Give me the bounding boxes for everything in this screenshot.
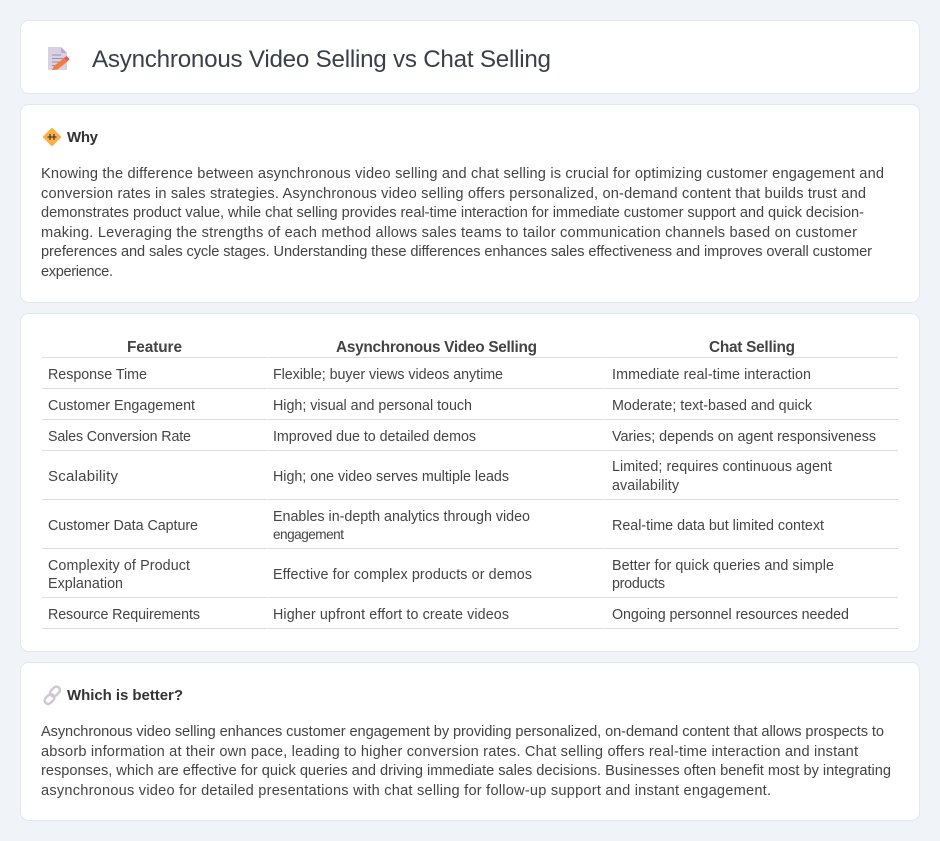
text block: which paragraph: asynchronous video for detailed presentations with chat selling for follow-up support and instant engagement.	[41, 783, 771, 799]
table header row: Chat Selling	[709, 339, 795, 356]
row: customer engagement	[48, 398, 813, 414]
row: customer data capture: Real-time data but limited context	[612, 518, 824, 534]
icon: link	[43, 685, 61, 705]
title: Asynchronous Video Selling vs Chat Selling	[92, 46, 551, 73]
row: customer data capture	[48, 509, 824, 542]
row: resource requirements: Higher upfront effort to create videos	[273, 607, 509, 623]
row: customer data capture: engagement	[273, 527, 344, 542]
text block: why paragraph: conversion rates in sales strategies. Asynchronous video selling offers personalized, on-demand content that builds trust and	[41, 186, 866, 202]
row: sales conversion rate: Improved due to detailed demos	[273, 429, 476, 445]
row: resource requirements: Ongoing personnel resources needed	[612, 607, 849, 623]
text block: which paragraph	[41, 724, 891, 799]
row: response time: Flexible; buyer views videos anytime	[273, 367, 503, 383]
panel: which is better	[20, 662, 920, 820]
row: resource requirements	[48, 607, 849, 623]
row: response time: Response Time	[48, 367, 147, 383]
row: complexity of product explanation: Effective for complex products or demos	[273, 567, 532, 583]
row: scalability: availability	[612, 478, 680, 494]
table header row	[127, 339, 795, 356]
row: response time	[48, 367, 811, 383]
panel: title header	[20, 20, 920, 94]
heading: why: Why	[67, 129, 99, 146]
row: customer engagement: Moderate; text-based and quick	[612, 398, 813, 414]
row: sales conversion rate	[48, 429, 876, 445]
row: customer engagement: Customer Engagement	[48, 398, 195, 414]
text block: which paragraph: Asynchronous video selling enhances customer engagement by providing personalized, on-demand content that allows prospects to	[41, 724, 884, 740]
row: scalability: High; one video serves multiple leads	[273, 469, 509, 485]
row: sales conversion rate: Varies; depends on agent responsiveness	[612, 429, 876, 445]
row: scalability: Scalability	[48, 468, 118, 485]
row: complexity of product explanation	[48, 558, 834, 592]
text block: which paragraph: absorb information at their own pace, leading to higher conversion rates. Chat selling offers real-time interaction and instant	[41, 744, 858, 760]
row: complexity of product explanation: Explanation	[48, 576, 123, 592]
row: customer data capture: Customer Data Capture	[48, 518, 198, 534]
heading: which is better: Which is better?	[67, 687, 183, 704]
text block: why paragraph: preferences and sales cycle stages. Understanding these differences enhances sales effectiveness and improves overall customer	[41, 244, 872, 260]
row: customer data capture: Enables in-depth analytics through video	[273, 509, 530, 525]
panel: why	[20, 104, 920, 302]
icon: warning diamond	[44, 128, 60, 146]
row: sales conversion rate: Sales Conversion Rate	[48, 429, 191, 445]
row: scalability: Limited; requires continuous agent	[612, 459, 832, 475]
row: customer engagement: High; visual and personal touch	[273, 398, 472, 414]
table header row: Feature	[127, 339, 182, 356]
text block: why paragraph: demonstrates product value, while chat selling provides real-time interaction for immediate customer support and quick decision-	[41, 205, 864, 221]
text block: why paragraph: experience.	[41, 264, 113, 280]
text block: why paragraph: making. Leveraging the strengths of each method allows sales teams to tailor communication channels based on customer	[41, 225, 857, 241]
row: complexity of product explanation: Better for quick queries and simple	[612, 558, 834, 574]
panel: comparison table	[20, 314, 920, 652]
text block: why paragraph	[41, 166, 884, 280]
row: scalability	[48, 459, 832, 494]
row: complexity of product explanation: products	[612, 576, 665, 592]
icon: memo with pencil	[48, 47, 70, 70]
text block: why paragraph: Knowing the difference between asynchronous video selling and chat selling is crucial for optimizing customer engagement and	[41, 166, 884, 182]
text block: which paragraph: responses, which are effective for quick queries and driving immediate sales decisions. Businesses often benefit most by integrating	[41, 763, 891, 779]
row: resource requirements: Resource Requirements	[48, 607, 200, 623]
table header row: Asynchronous Video Selling	[336, 339, 537, 356]
row: complexity of product explanation: Complexity of Product	[48, 558, 190, 574]
row: response time: Immediate real-time interaction	[612, 367, 811, 383]
